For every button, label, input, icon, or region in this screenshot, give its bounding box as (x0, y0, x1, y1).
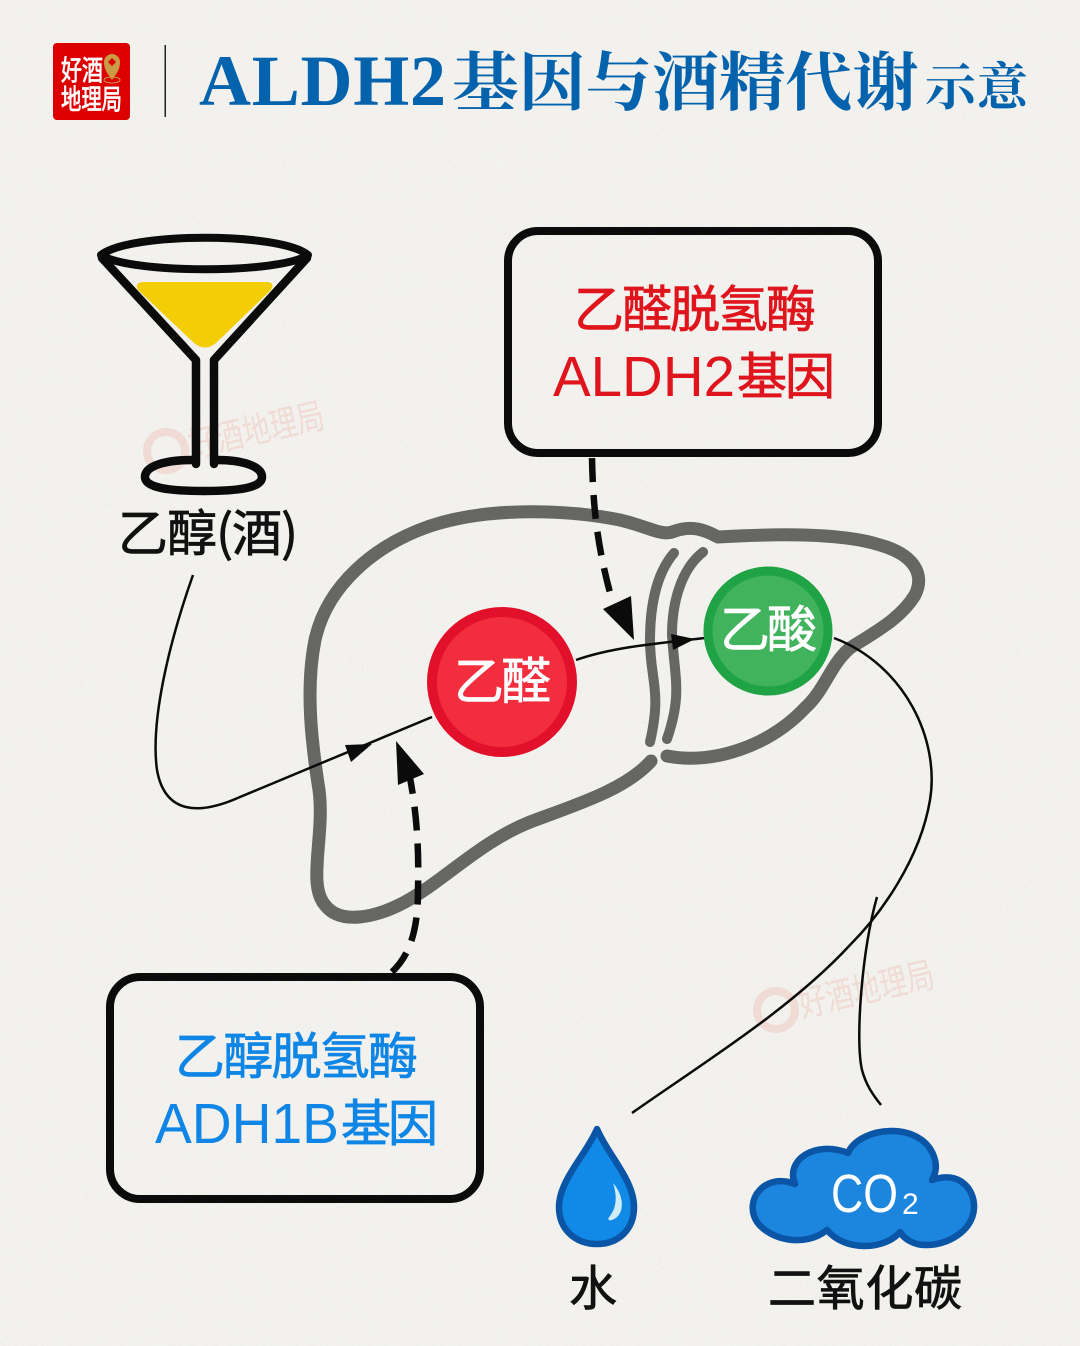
title: ALDH2 (199, 41, 446, 121)
icon: CO2 cloud: 2 (902, 1188, 919, 1221)
watermark: lower: 好酒地理局 (793, 946, 939, 1028)
title (199, 41, 1031, 121)
header divider (164, 45, 166, 117)
title: 示意 (925, 59, 1031, 117)
icon: water drop (559, 1129, 634, 1244)
arrow: dashed from ALDH2 box (592, 458, 634, 640)
panel: ALDH2 enzyme (508, 231, 878, 453)
watermark: upper (147, 387, 329, 470)
arrow: dashed from ADH1B box (392, 741, 424, 972)
label: water: 水 (569, 1249, 617, 1319)
icon: CO2 cloud: CO (831, 1164, 898, 1224)
node: acetic acid: 乙酸 (720, 590, 817, 662)
node: acetaldehyde (432, 612, 572, 752)
label: carbon dioxide: 二氧化碳 (768, 1249, 962, 1319)
node: acetaldehyde: 乙醛 (454, 642, 551, 714)
label: ethanol: 乙醇(酒) (118, 494, 298, 566)
arrow: acetaldehyde to acetic acid (576, 634, 705, 660)
panel: ADH1B enzyme: 基因 (341, 1084, 438, 1156)
watermark: lower (757, 946, 939, 1029)
icon: CO2 cloud (753, 1131, 974, 1246)
watermark: upper: 好酒地理局 (183, 387, 329, 469)
panel: ADH1B enzyme: 乙醇脱氢酶 (175, 1017, 418, 1089)
logo badge (53, 43, 130, 120)
arrow: ethanol to acetaldehyde (156, 575, 432, 808)
panel: ADH1B enzyme (110, 977, 480, 1199)
panel: ALDH2 enzyme: 乙醛脱氢酶 (574, 270, 816, 342)
arrow: to water and CO2 (632, 638, 932, 1113)
icon: map pin (104, 54, 120, 83)
liquid (137, 282, 272, 348)
logo badge: 地理局 (61, 78, 122, 118)
liver outline (310, 512, 919, 917)
icon: cocktail glass (101, 238, 308, 491)
node: acetic acid (708, 571, 828, 691)
panel: ALDH2 enzyme: 基因 (737, 337, 835, 409)
logo badge: 好酒 (61, 49, 103, 89)
title: 基因与酒精代谢 (452, 48, 919, 119)
panel: ADH1B enzyme: ADH1B (155, 1092, 339, 1156)
panel: ALDH2 enzyme: ALDH2 (553, 345, 735, 409)
